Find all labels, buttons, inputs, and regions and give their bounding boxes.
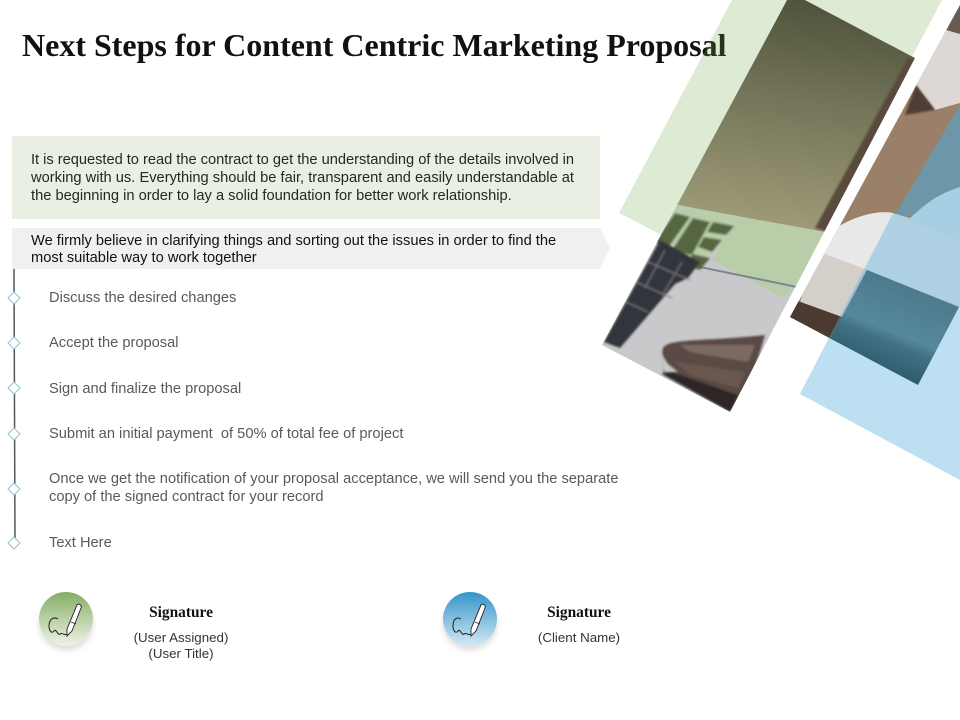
signature block: client	[538, 604, 620, 645]
step 6: Text Here	[49, 535, 112, 551]
step 5: Once we get the notification of your proposal acceptance, we will send you the separate	[49, 471, 618, 487]
photo: laptop	[600, 0, 920, 420]
step 5: copy of the signed contract for your record	[49, 489, 324, 505]
step 5	[49, 471, 618, 505]
icon: green signature	[39, 592, 93, 650]
signature block: client: Signature	[547, 604, 611, 621]
step 4: Submit an initial payment of 50% of total fee of project	[49, 426, 403, 442]
panel: belief arrow banner: We firmly believe in clarifying things and sorting out the issues in order to find the	[31, 233, 556, 249]
signature block: user: (User Title)	[148, 646, 214, 661]
panel: blue parallelogram	[800, 213, 960, 480]
icon: blue signature	[443, 592, 497, 650]
panel: intro text	[12, 136, 600, 219]
signature block: user	[134, 604, 228, 661]
panel: intro text: It is requested to read the contract to get the understanding of the details involved in	[31, 152, 574, 168]
panel: belief arrow banner: most suitable way to work together	[31, 250, 257, 266]
step 1: Discuss the desired changes	[49, 290, 236, 306]
panel: green parallelogram	[619, 0, 942, 298]
panel: intro text: working with us. Everything should be fair, transparent and easily understandable at	[31, 170, 574, 186]
step 3: Sign and finalize the proposal	[49, 381, 241, 397]
signature block: user: (User Assigned)	[134, 630, 228, 645]
photo: desk and book	[785, 0, 960, 390]
title: Next Steps for Content Centric Marketing Proposal	[22, 27, 726, 63]
panel: belief arrow banner	[12, 228, 610, 269]
timeline	[8, 269, 20, 549]
step 2: Accept the proposal	[49, 335, 179, 351]
signature block: user: Signature	[149, 604, 213, 621]
panel: intro text: the beginning in order to lay a solid foundation for better work relationship.	[31, 188, 512, 204]
signature block: client: (Client Name)	[538, 630, 620, 645]
